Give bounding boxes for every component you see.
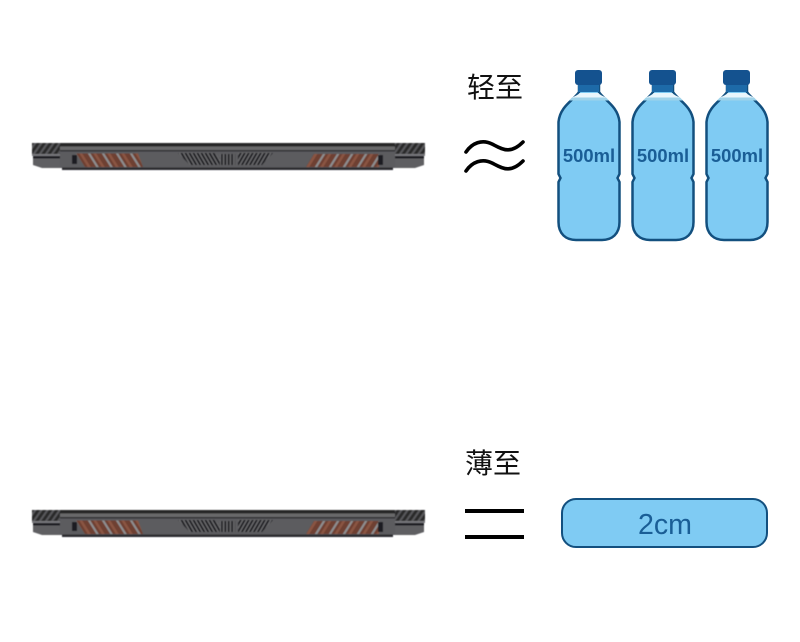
bottle label 2: 500ml xyxy=(637,145,689,166)
laptop rear view: bottom xyxy=(32,510,425,537)
label: 薄至: 薄至 xyxy=(465,448,521,479)
laptop rear view: top xyxy=(32,143,425,170)
bottle label 3: 500ml xyxy=(711,145,763,166)
label: 轻至: 轻至 xyxy=(467,72,523,103)
bottle 1 xyxy=(558,70,620,240)
bottle label 1: 500ml xyxy=(563,145,615,166)
thickness label: 2cm xyxy=(638,509,692,541)
approx symbol xyxy=(466,142,523,171)
bottle 3 xyxy=(706,70,768,240)
thickness box: 2cm xyxy=(562,499,767,547)
bottle 2 xyxy=(632,70,694,240)
equals symbol xyxy=(465,509,524,539)
